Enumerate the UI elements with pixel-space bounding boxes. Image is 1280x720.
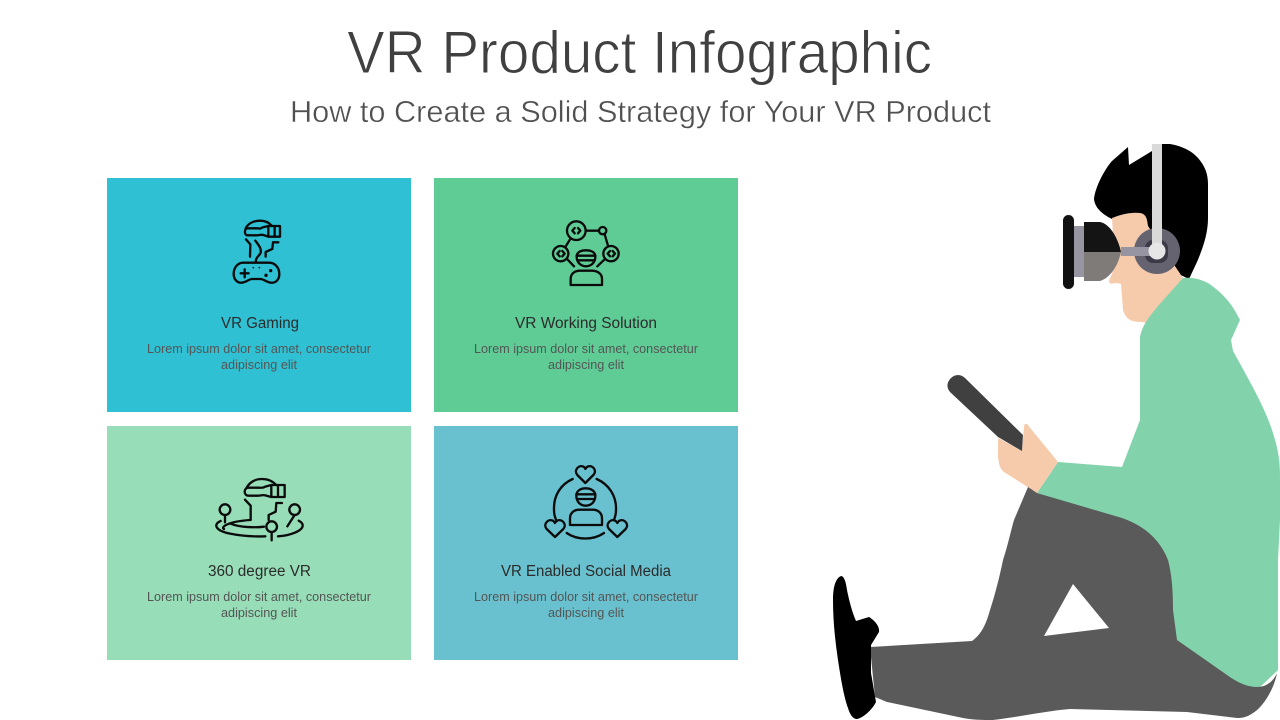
icon: VR user with hearts [545,466,627,538]
description [147,590,371,620]
lens upper [1084,222,1121,252]
description: Lorem ipsum dolor sit amet, consectetur [474,342,698,356]
description: Lorem ipsum dolor sit amet, consectetur [147,342,371,356]
heading: VR Working Solution [515,315,657,332]
icon: 360 degree VR headset [216,479,303,540]
hair [1094,144,1208,279]
description [474,590,698,620]
description: adipiscing elit [221,606,298,620]
description: adipiscing elit [548,606,625,620]
subtitle: How to Create a Solid Strategy for Your VR Product [290,94,991,129]
description [474,342,698,372]
heading: VR Gaming [221,315,299,332]
front strap [1063,215,1074,289]
lens lower [1084,252,1121,281]
panel: VR Working Solution [434,178,738,412]
VR headset [1063,144,1180,289]
panel: VR Gaming [107,178,411,412]
description: adipiscing elit [548,358,625,372]
panel: 360 degree VR [107,426,411,660]
description: adipiscing elit [221,358,298,372]
face [1109,213,1183,323]
heading: VR Enabled Social Media [501,563,671,580]
rod [1121,247,1151,256]
hoodie [1037,278,1280,690]
hand [998,424,1058,493]
description [147,342,371,372]
ear cup inner [1145,240,1168,263]
ear pivot [1148,242,1166,260]
heading: 360 degree VR [208,563,311,580]
description: Lorem ipsum dolor sit amet, consectetur [474,590,698,604]
illustration: seated person wearing VR headset [833,144,1280,720]
phone [947,375,1023,451]
shoe [833,576,879,719]
band [1074,226,1085,277]
icon: VR user with code network [553,221,619,285]
title: VR Product Infographic [347,19,932,86]
icon: VR headset and game controller [234,221,280,283]
ear cup [1134,228,1180,274]
description: Lorem ipsum dolor sit amet, consectetur [147,590,371,604]
panel: VR Enabled Social Media [434,426,738,660]
trousers [870,487,1277,720]
head strap [1152,144,1162,252]
